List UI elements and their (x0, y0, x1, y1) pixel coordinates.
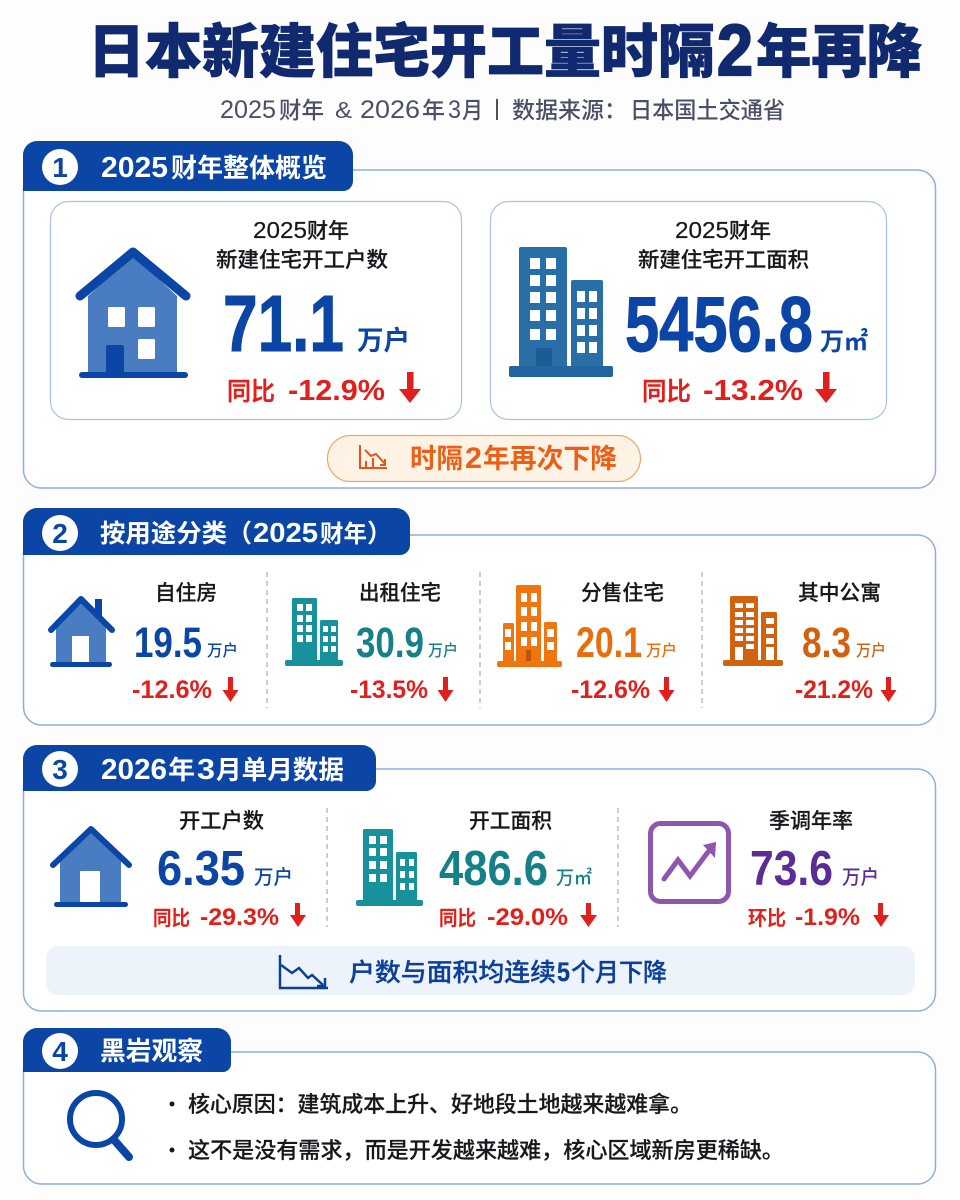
subtitle: 日本国土交通省 (630, 97, 785, 123)
item: seasonally adjusted rate: 季调年率 (769, 810, 853, 833)
card label: 财年 (729, 220, 771, 243)
value 5456.8: 5456.8 (625, 280, 813, 368)
card: housing units (50, 202, 462, 420)
icon: teal buildings (356, 829, 423, 906)
icon: magnifier (70, 1093, 129, 1157)
callout text (410, 442, 617, 475)
section tab 1: 财年整体概览 (171, 153, 327, 183)
item: for sale: 分售住宅 (581, 581, 664, 605)
bullet text: 核心原因：建筑成本上升、好地段土地越来越难拿。 (188, 1092, 692, 1117)
callout text: 5 (557, 957, 570, 987)
value 8.3: 8.3 (802, 619, 851, 667)
icon: falling line chart (280, 955, 328, 988)
card label: 2025 (253, 217, 307, 243)
change -12.6%: -12.6% (132, 676, 212, 704)
change -13.5%: -13.5% (350, 676, 428, 704)
section tab 4: 4 (52, 1036, 68, 1067)
subtitle: 月 (462, 97, 483, 123)
section tab 3: 3 (197, 754, 215, 786)
change -29.3%: 同比 (153, 907, 190, 930)
item: monthly units: 开工户数 (179, 810, 264, 833)
subtitle: 2025 (220, 96, 276, 124)
icon: buildings (509, 247, 613, 377)
item: owner-occupied (50, 582, 238, 704)
value 6.35: 万户 (254, 866, 293, 889)
icon: falling chart (360, 445, 387, 468)
value 30.9: 万户 (428, 642, 458, 660)
section tab 2: 2 (52, 518, 68, 549)
value 71.1: 71.1 (223, 279, 344, 368)
value 73.6: 万户 (842, 866, 879, 889)
panel: March 2026 (23, 745, 936, 1011)
title: 2 (717, 11, 753, 91)
title: 日本新建住宅开工量时隔 (88, 20, 715, 85)
value 19.5: 19.5 (134, 619, 202, 667)
item: owner-occupied: 自住房 (155, 582, 217, 605)
change -29.0%: -29.0% (487, 904, 568, 931)
value 486.6: 486.6 (439, 842, 548, 896)
panel: overview (23, 141, 936, 488)
change -13.2%: 同比 (642, 378, 691, 406)
subtitle: 年 (422, 97, 445, 123)
panel: by use (23, 508, 936, 725)
item: for sale (497, 581, 677, 704)
value 8.3: 万户 (856, 642, 886, 660)
card label: 新建住宅开工面积 (638, 248, 809, 272)
value 486.6: 万㎡ (556, 867, 592, 889)
item: rental: 出租住宅 (359, 581, 441, 605)
panel: observations (23, 1028, 936, 1184)
icon: orange buildings (497, 585, 562, 667)
item: seasonally adjusted rate (650, 810, 889, 931)
callout: decline pill (328, 436, 640, 482)
section tab 3: 月单月数据 (216, 755, 344, 785)
subtitle (220, 96, 785, 124)
callout text (349, 957, 667, 987)
change -29.0%: 同比 (439, 907, 476, 930)
card label: 财年 (307, 220, 349, 243)
section tab 4 (23, 1028, 231, 1072)
section tab 4: 黑岩观察 (100, 1036, 203, 1066)
section tab 2: ） (367, 520, 392, 548)
subtitle: 财年 (279, 97, 324, 123)
section tab 3 (23, 745, 376, 791)
card label: 新建住宅开工户数 (216, 248, 388, 272)
callout text: 2 (465, 442, 482, 475)
subtitle: 3 (448, 96, 461, 124)
change -1.9%: 环比 (748, 907, 786, 930)
value 20.1: 20.1 (576, 619, 642, 667)
bullet text (170, 1092, 784, 1163)
change -12.6%: -12.6% (571, 676, 650, 704)
change -29.3% (153, 903, 306, 931)
section tab 1: 2025 (101, 152, 168, 184)
callout text: 时隔 (410, 444, 463, 474)
value 19.5: 万户 (207, 642, 238, 660)
section tab 3: 3 (52, 754, 68, 785)
change -13.2% (642, 372, 837, 407)
subtitle: 数据来源： (512, 97, 627, 123)
section tab 3: 年 (168, 755, 195, 785)
change -12.9%: -12.9% (288, 375, 385, 407)
section tab 2: 按用途分类 (100, 519, 227, 548)
change -13.2%: -13.2% (703, 375, 803, 407)
change -21.2%: -21.2% (795, 676, 873, 704)
card label (638, 217, 809, 272)
value 20.1: 万户 (646, 642, 677, 660)
card label (216, 217, 388, 272)
icon: house with chimney (50, 599, 112, 667)
title: 年再降 (756, 20, 922, 85)
item: condominiums: 其中公寓 (798, 582, 881, 605)
value 6.35: 6.35 (157, 842, 245, 896)
item: rental (285, 581, 458, 704)
item: condominiums (723, 582, 896, 704)
section tab 3: 2026 (101, 754, 167, 786)
section tab 1: 1 (52, 152, 68, 183)
change -12.9%: 同比 (227, 378, 275, 406)
section tab 2: （ (227, 520, 252, 548)
value 71.1: 万户 (357, 326, 410, 356)
section tab 1 (23, 141, 353, 191)
change -12.9% (227, 372, 421, 407)
callout: five-month decline (46, 946, 915, 995)
icon: house (53, 829, 129, 907)
value 73.6: 73.6 (750, 842, 833, 896)
callout text: 个月下降 (571, 959, 667, 987)
value 30.9: 30.9 (356, 619, 424, 667)
callout text: 年再次下降 (483, 444, 617, 474)
title (88, 11, 922, 91)
subtitle: & (335, 97, 352, 123)
change -1.9%: -1.9% (795, 904, 860, 931)
section tab 2: 财年 (320, 521, 367, 548)
value 5456.8: 万㎡ (820, 327, 868, 356)
item: monthly area: 开工面积 (469, 810, 552, 833)
card: floor area (490, 202, 886, 420)
section tab 2 (23, 508, 410, 555)
item: monthly area (356, 810, 597, 931)
icon: teal buildings (285, 598, 343, 666)
change -1.9% (748, 903, 889, 931)
change -29.3%: -29.3% (200, 904, 279, 931)
bullet text: 这不是没有需求，而是开发越来越难，核心区域新房更稀缺。 (188, 1138, 784, 1163)
callout text: 户数与面积均连续 (349, 959, 556, 987)
change -29.0% (439, 903, 597, 931)
icon: house (79, 252, 188, 378)
item: monthly units (53, 810, 306, 931)
section tab 2: 2025 (253, 517, 318, 548)
subtitle: 2026 (360, 96, 420, 124)
icon: dark orange buildings (723, 596, 783, 666)
card label: 2025 (675, 217, 729, 243)
icon: rising chart (650, 824, 728, 902)
